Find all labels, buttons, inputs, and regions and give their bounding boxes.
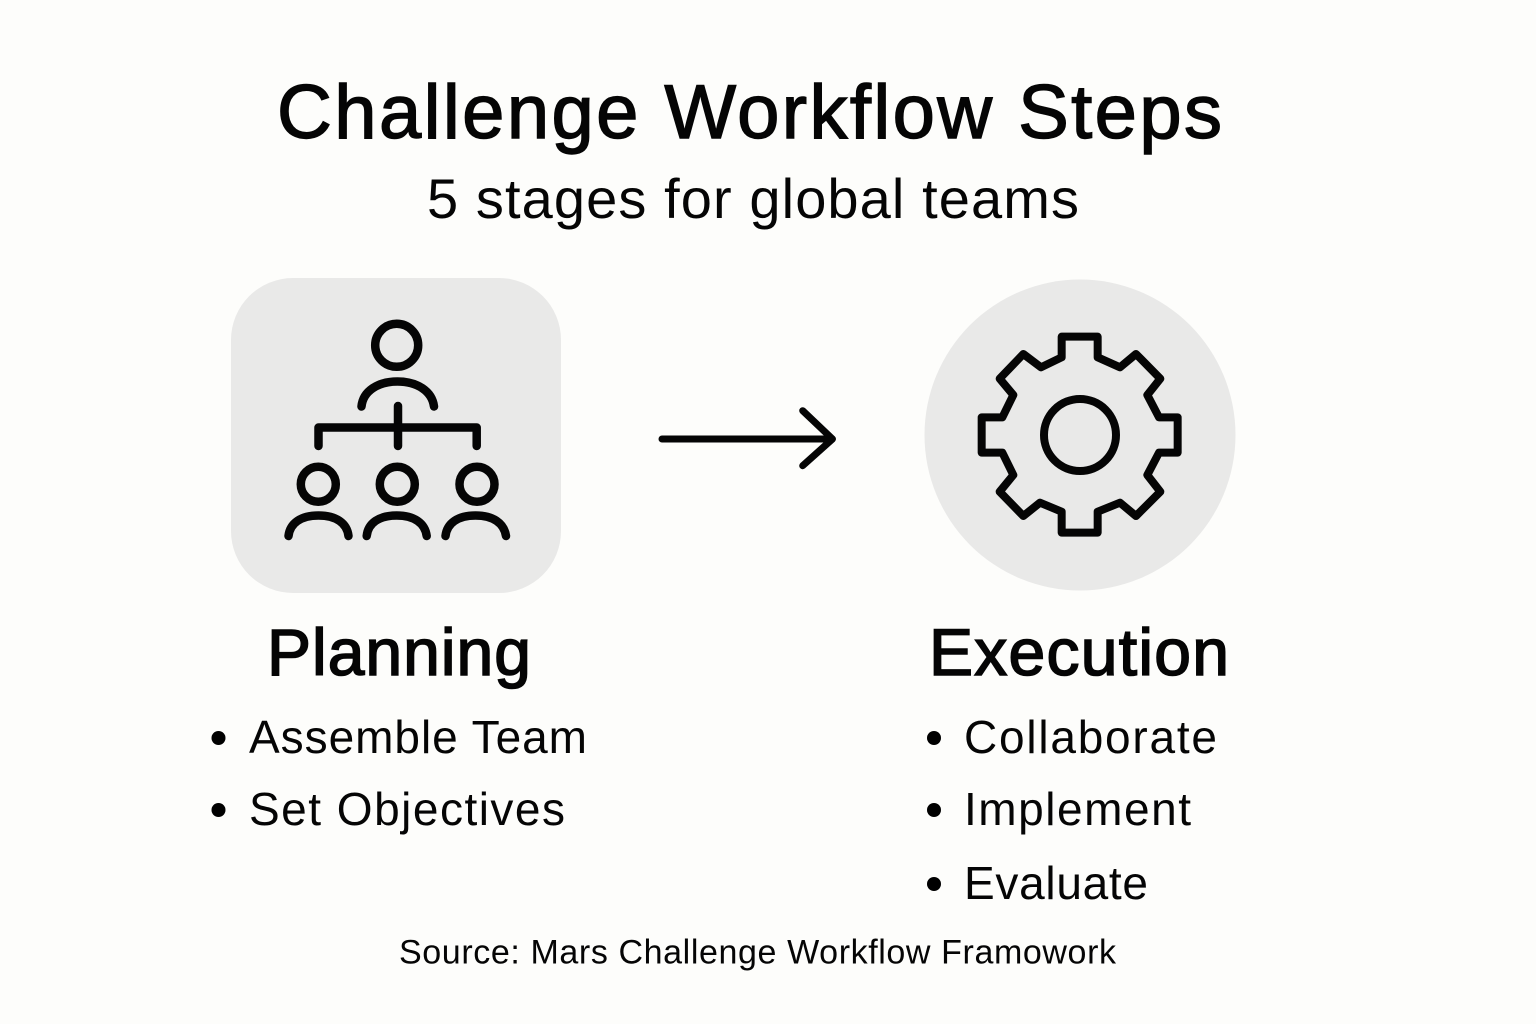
icon: team hierarchy — [288, 324, 506, 536]
panel: planning icon tile — [231, 278, 561, 593]
subtitle: 5 stages for global teams — [427, 167, 1079, 230]
list: planning items — [212, 711, 587, 835]
source note: Source: Mars Challenge Workflow Framowork — [399, 934, 1117, 972]
list: execution items: Implement — [964, 783, 1191, 835]
list: execution items: Evaluate — [964, 857, 1148, 909]
list: execution items — [927, 711, 1217, 909]
icon: gear — [982, 337, 1178, 533]
list: planning items: Assemble Team — [249, 711, 587, 763]
arrow — [662, 411, 832, 466]
title: Challenge Workflow Steps — [277, 70, 1222, 155]
list: planning items: Set Objectives — [249, 783, 565, 835]
list: execution items: Collaborate — [964, 711, 1217, 763]
panel: execution icon disc — [924, 280, 1236, 590]
heading: planning: Planning — [267, 615, 531, 689]
heading: execution: Execution — [929, 615, 1229, 689]
